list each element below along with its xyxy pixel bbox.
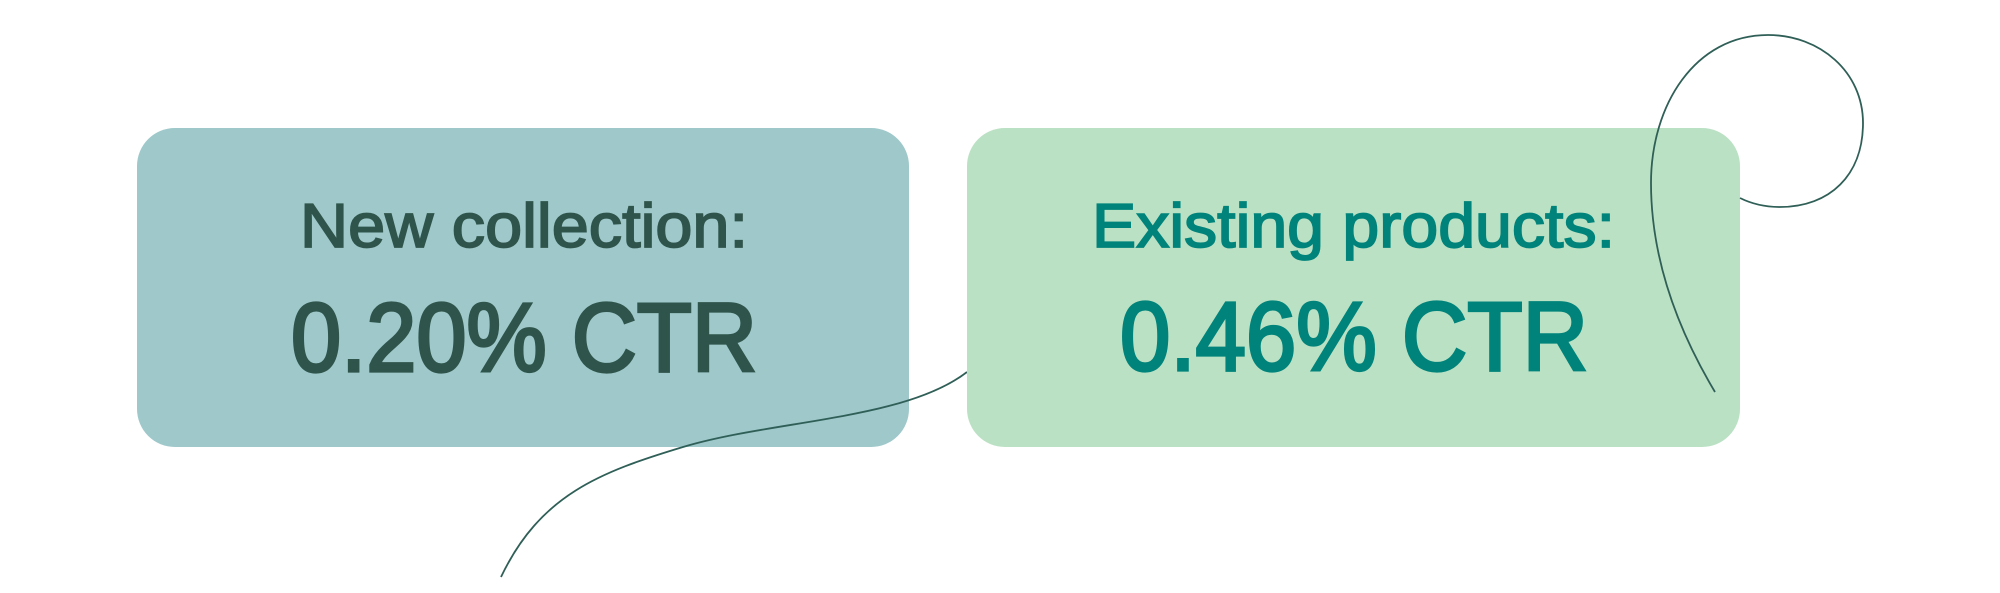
heading: new collection: New collection: bbox=[300, 192, 748, 261]
panel: new collection bbox=[137, 128, 909, 447]
card background: existing products bbox=[967, 128, 1740, 447]
connector curve: bottom left to existing products card bbox=[501, 372, 967, 577]
card background: new collection bbox=[137, 128, 909, 447]
metric: 0.20% CTR: 0.20% CTR bbox=[291, 283, 757, 392]
loop curve: around existing products card bbox=[1651, 35, 1863, 392]
metric: 0.46% CTR: 0.46% CTR bbox=[1120, 282, 1588, 391]
heading: existing products: Existing products: bbox=[1092, 192, 1615, 261]
panel: existing products bbox=[967, 128, 1740, 447]
